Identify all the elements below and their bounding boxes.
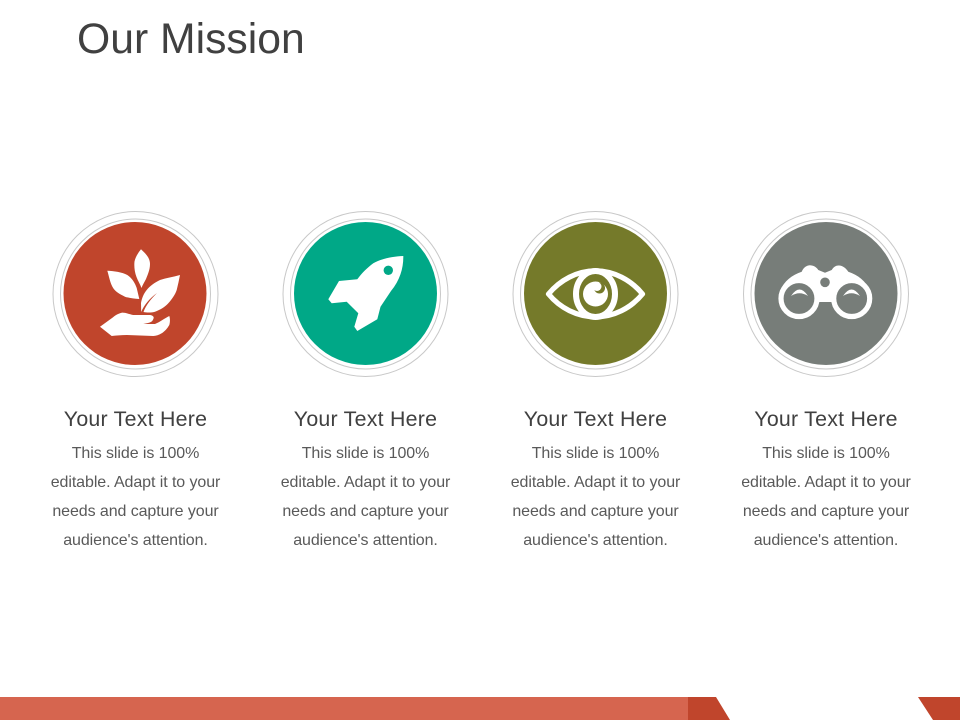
text: needs and capture your xyxy=(52,503,219,520)
text: needs and capture your xyxy=(743,503,909,520)
icon: rocket xyxy=(283,212,448,376)
text: editable. Adapt it to your xyxy=(511,474,680,491)
text block 1 xyxy=(51,407,220,549)
text: This slide is 100% xyxy=(762,445,890,462)
text: editable. Adapt it to your xyxy=(281,474,450,491)
text block 3 xyxy=(511,407,680,549)
icon: plant in hand xyxy=(53,212,218,376)
text: Your Text Here xyxy=(754,407,898,431)
footer bar xyxy=(0,697,960,720)
text: audience's attention. xyxy=(293,532,438,549)
text block 4 xyxy=(741,407,911,549)
text block 2 xyxy=(281,407,450,549)
text: needs and capture your xyxy=(512,503,679,520)
text: editable. Adapt it to your xyxy=(741,474,911,491)
text: This slide is 100% xyxy=(532,445,659,462)
icon: binoculars xyxy=(744,212,908,376)
text: audience's attention. xyxy=(754,532,898,549)
text: This slide is 100% xyxy=(72,445,199,462)
text: This slide is 100% xyxy=(302,445,429,462)
text: editable. Adapt it to your xyxy=(51,474,220,491)
text: Your Text Here xyxy=(64,407,207,431)
text: audience's attention. xyxy=(523,532,668,549)
title: Our Mission xyxy=(77,15,305,63)
text: needs and capture your xyxy=(282,503,449,520)
text: Your Text Here xyxy=(524,407,667,431)
icon: eye xyxy=(513,212,678,376)
text: audience's attention. xyxy=(63,532,208,549)
text: Your Text Here xyxy=(294,407,437,431)
